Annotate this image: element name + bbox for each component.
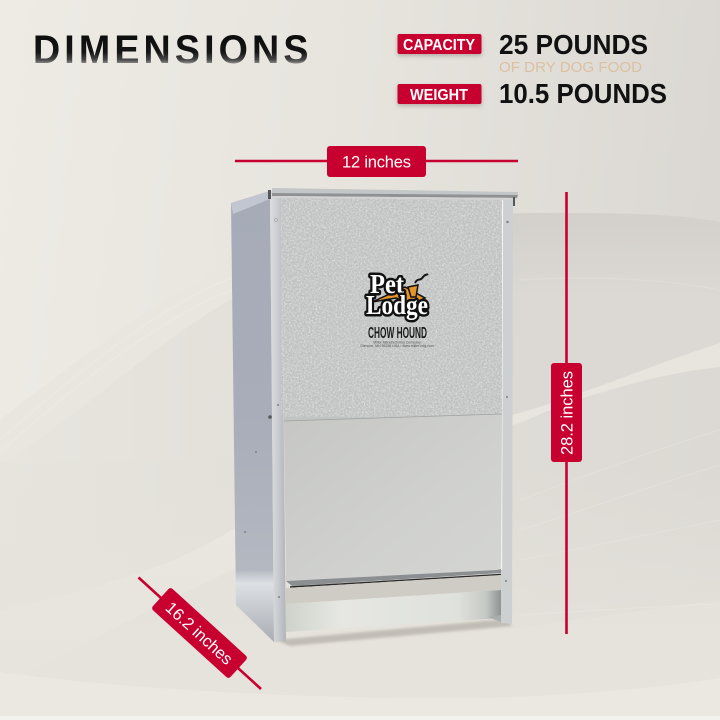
- brand logo: CHOW HOUND: [368, 325, 427, 342]
- dimension: height 28.2 inches: 28.2 inches: [558, 371, 576, 455]
- spec: weight: [398, 78, 667, 109]
- trough front: [286, 590, 501, 632]
- feed lip: [286, 569, 501, 586]
- trough band: [286, 575, 501, 604]
- rivets: [244, 219, 509, 598]
- weight value: 10.5 POUNDS: [499, 78, 667, 109]
- dimension: depth 16.2 inches: [138, 578, 261, 689]
- weight badge: [398, 84, 482, 104]
- title: DIMENSIONS: [33, 28, 308, 72]
- side panel: [231, 191, 274, 642]
- dimension: width 12 inches: 12 inches: [342, 154, 411, 172]
- right flange: [501, 198, 513, 624]
- galvanized front panel: [281, 197, 502, 421]
- left flange: [270, 191, 286, 642]
- capacity badge: CAPACITY: [403, 37, 475, 54]
- brand logo: Miller Manufacturing Company: [373, 340, 421, 344]
- product: metal feeder: [231, 188, 518, 646]
- brand logo: [360, 269, 434, 348]
- dimension: width 12 inches: [235, 146, 518, 177]
- brand logo: Glencoe, MN 55336 USA • www.miller-mfg.com: [360, 344, 434, 348]
- weight badge: WEIGHT: [410, 87, 468, 104]
- front flap: [284, 414, 502, 581]
- brand logo: Lodge: [366, 290, 428, 320]
- dimension: depth 16.2 inches: 16.2 inches: [162, 599, 236, 669]
- dimension: height 28.2 inches: [551, 192, 582, 634]
- spec: capacity: [398, 29, 648, 60]
- capacity value: 25 POUNDS: [499, 29, 648, 60]
- lid: [268, 188, 518, 206]
- brand logo: Pet: [370, 269, 404, 299]
- capacity note: OF DRY DOG FOOD: [499, 60, 642, 76]
